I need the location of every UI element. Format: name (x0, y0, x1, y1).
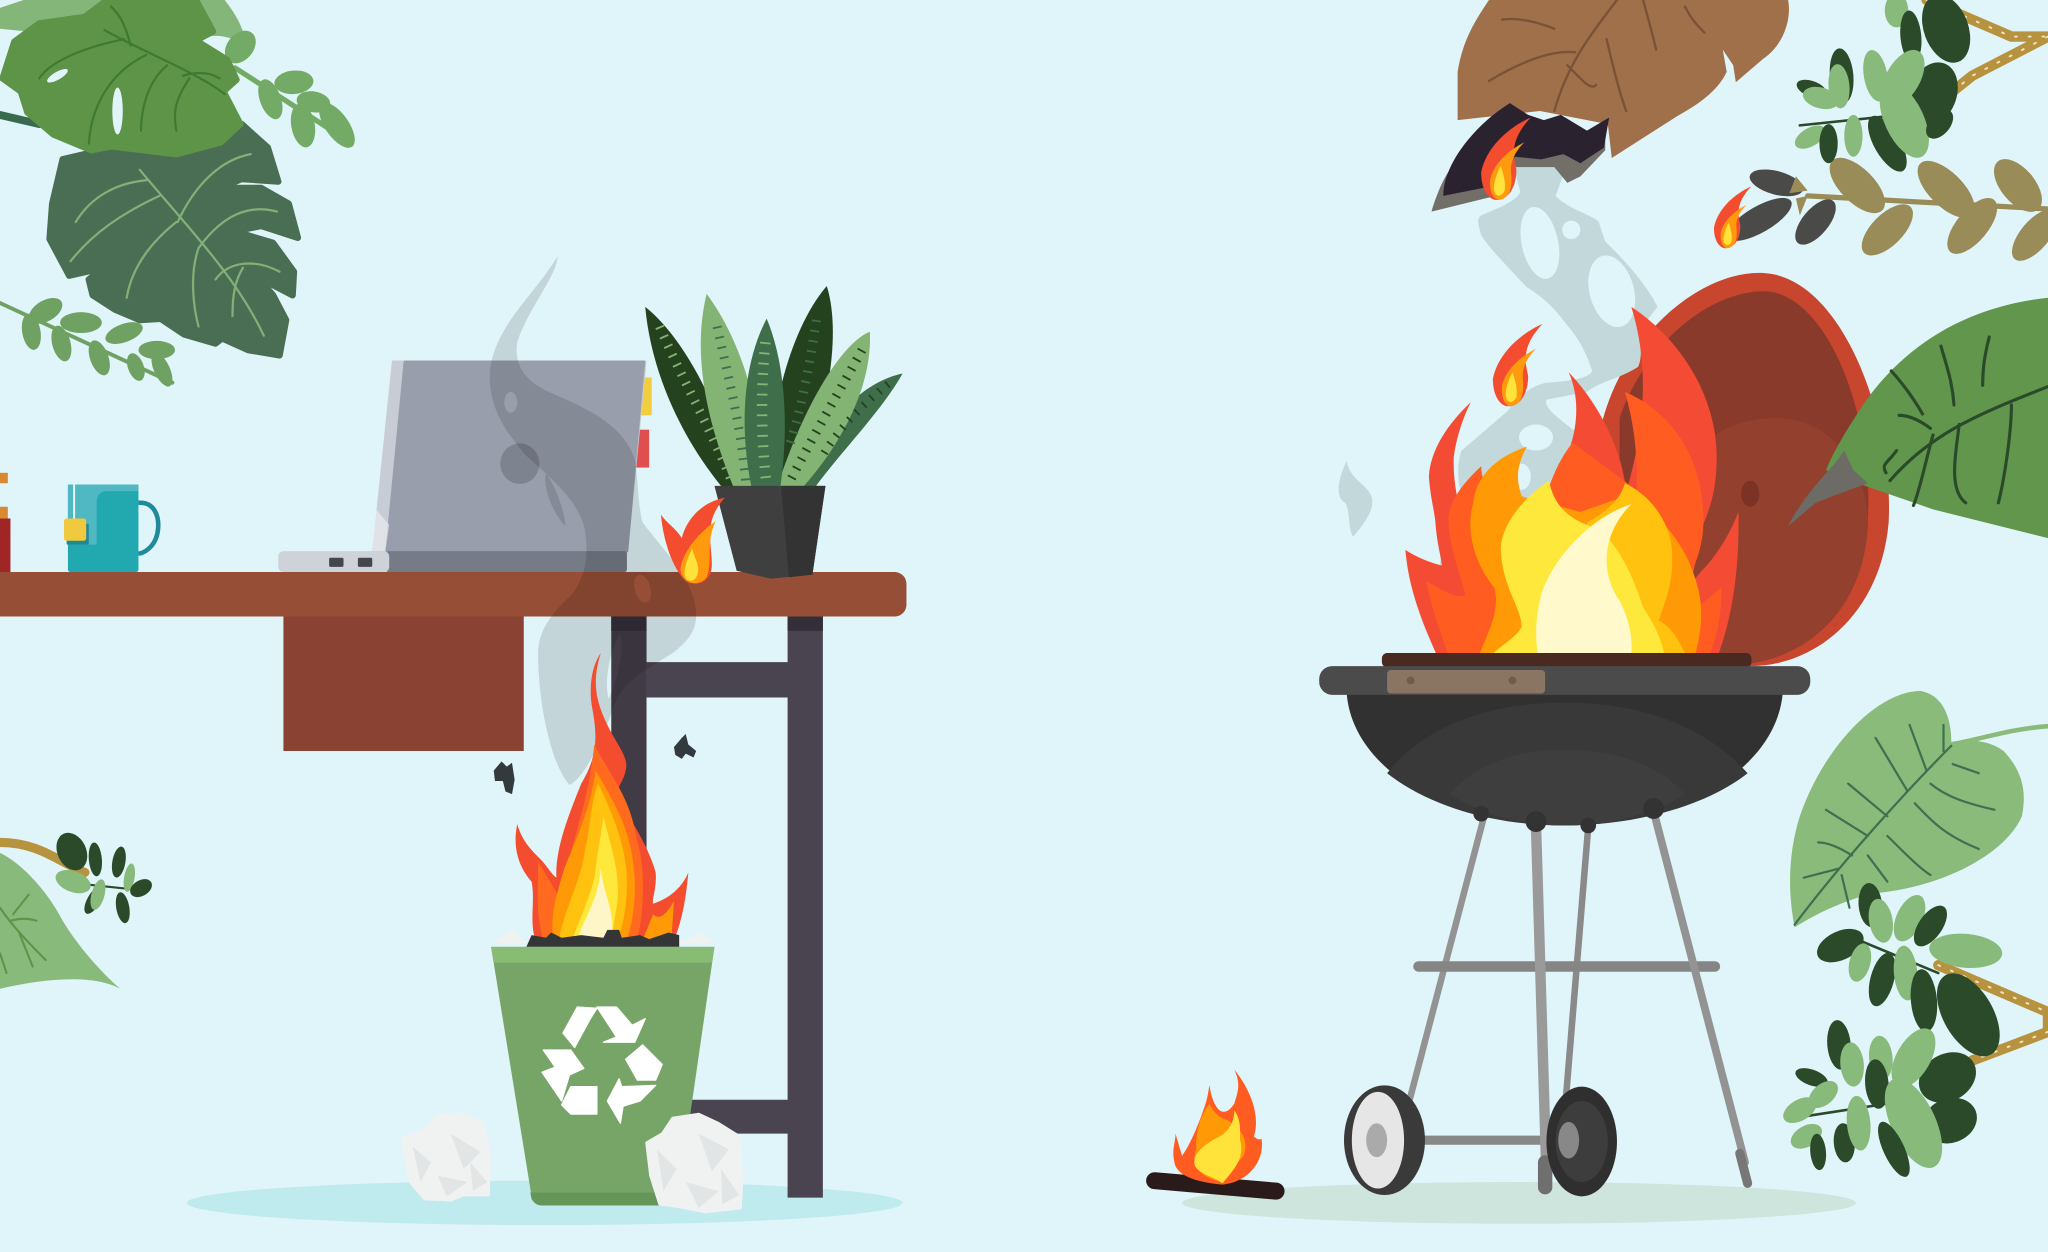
bin flame: yellow (572, 816, 618, 940)
ground shadow: grill (1182, 1182, 1856, 1224)
grill legs (1409, 811, 1745, 1175)
smoke: rising from bin over laptop (490, 256, 696, 785)
bin flame: red (516, 653, 688, 940)
desk leg: front with braces (647, 616, 823, 1198)
plant: burning brown leaf (1432, 0, 1789, 212)
plant: lower-right leaves with vine (1779, 882, 2048, 1181)
plant: top-right burnt branch (1721, 149, 2048, 268)
paper peeking from bin (492, 930, 713, 943)
flame: outer red body (1405, 402, 1739, 666)
ground shadow: desk (187, 1181, 903, 1225)
plant: burning green leaf right (1788, 298, 2048, 538)
grill bowl (1347, 692, 1783, 825)
flame: tall red tongue (1600, 307, 1717, 575)
icon: teal mug with tea bag (64, 485, 158, 572)
campfire: small fire on log (1155, 1070, 1276, 1191)
plant: top-left foliage (0, 0, 362, 390)
recycling bin (491, 947, 714, 1206)
plant: lower-right large leaf (1790, 691, 2048, 927)
items: books at edge (0, 473, 10, 572)
grill rim (1319, 666, 1810, 695)
flame: small by plant pot (661, 498, 725, 584)
grill (1319, 653, 1810, 1196)
flame: amber layer (1587, 483, 1685, 666)
wheel: rear (1546, 1087, 1617, 1196)
flame: on burnt branch (1714, 186, 1751, 248)
grill knobs (1473, 798, 1664, 833)
icon: ash flakes (494, 734, 696, 794)
snake plant stripes (660, 320, 888, 486)
flame: on burnt leaf (1481, 118, 1531, 200)
flame: orange layer (1470, 447, 1701, 666)
wooden handle (1387, 670, 1545, 694)
snake plant leaves (645, 286, 903, 491)
crumpled paper: right (647, 1114, 742, 1212)
flame: floating above main fire (1493, 324, 1543, 406)
flame: red-orange right tongue (1620, 392, 1703, 614)
flame: center red tongue (1528, 372, 1627, 614)
bin flame: orange (538, 744, 643, 940)
bin flame: cream (577, 869, 612, 940)
bin flame: amber (559, 784, 627, 940)
crumpled paper: left (402, 1114, 490, 1200)
plant pot (714, 486, 825, 579)
main grill fire (1405, 307, 1739, 666)
sticky notes behind laptop (632, 377, 652, 468)
desk top (0, 572, 906, 616)
desk drawer (283, 616, 524, 751)
plant: lower-left foliage (0, 828, 155, 989)
desk (0, 572, 906, 1198)
smoke holes (1512, 203, 1643, 490)
laptop (278, 362, 645, 572)
wheel: front (1344, 1085, 1425, 1195)
plant: top-right leaves with vine (1791, 0, 2048, 177)
grill grate (1382, 653, 1752, 667)
flame: red-orange body (1426, 443, 1721, 666)
grill lid behind flames (1593, 273, 1889, 666)
flame: yellow layer (1482, 481, 1665, 666)
icon: recycling symbol (542, 1007, 662, 1123)
plant: snake plant in pot (645, 286, 903, 579)
waste bin fire (492, 653, 713, 947)
smoke: from burning leaf to flames (1440, 167, 1657, 590)
flame: cream core (1536, 504, 1632, 666)
smoke: wisp left of main flame (1339, 461, 1372, 537)
grill foot tips (1740, 1153, 1748, 1183)
desk leg: back (611, 616, 647, 852)
charred paper (526, 930, 679, 947)
burnt leaf edge (1432, 131, 1605, 212)
